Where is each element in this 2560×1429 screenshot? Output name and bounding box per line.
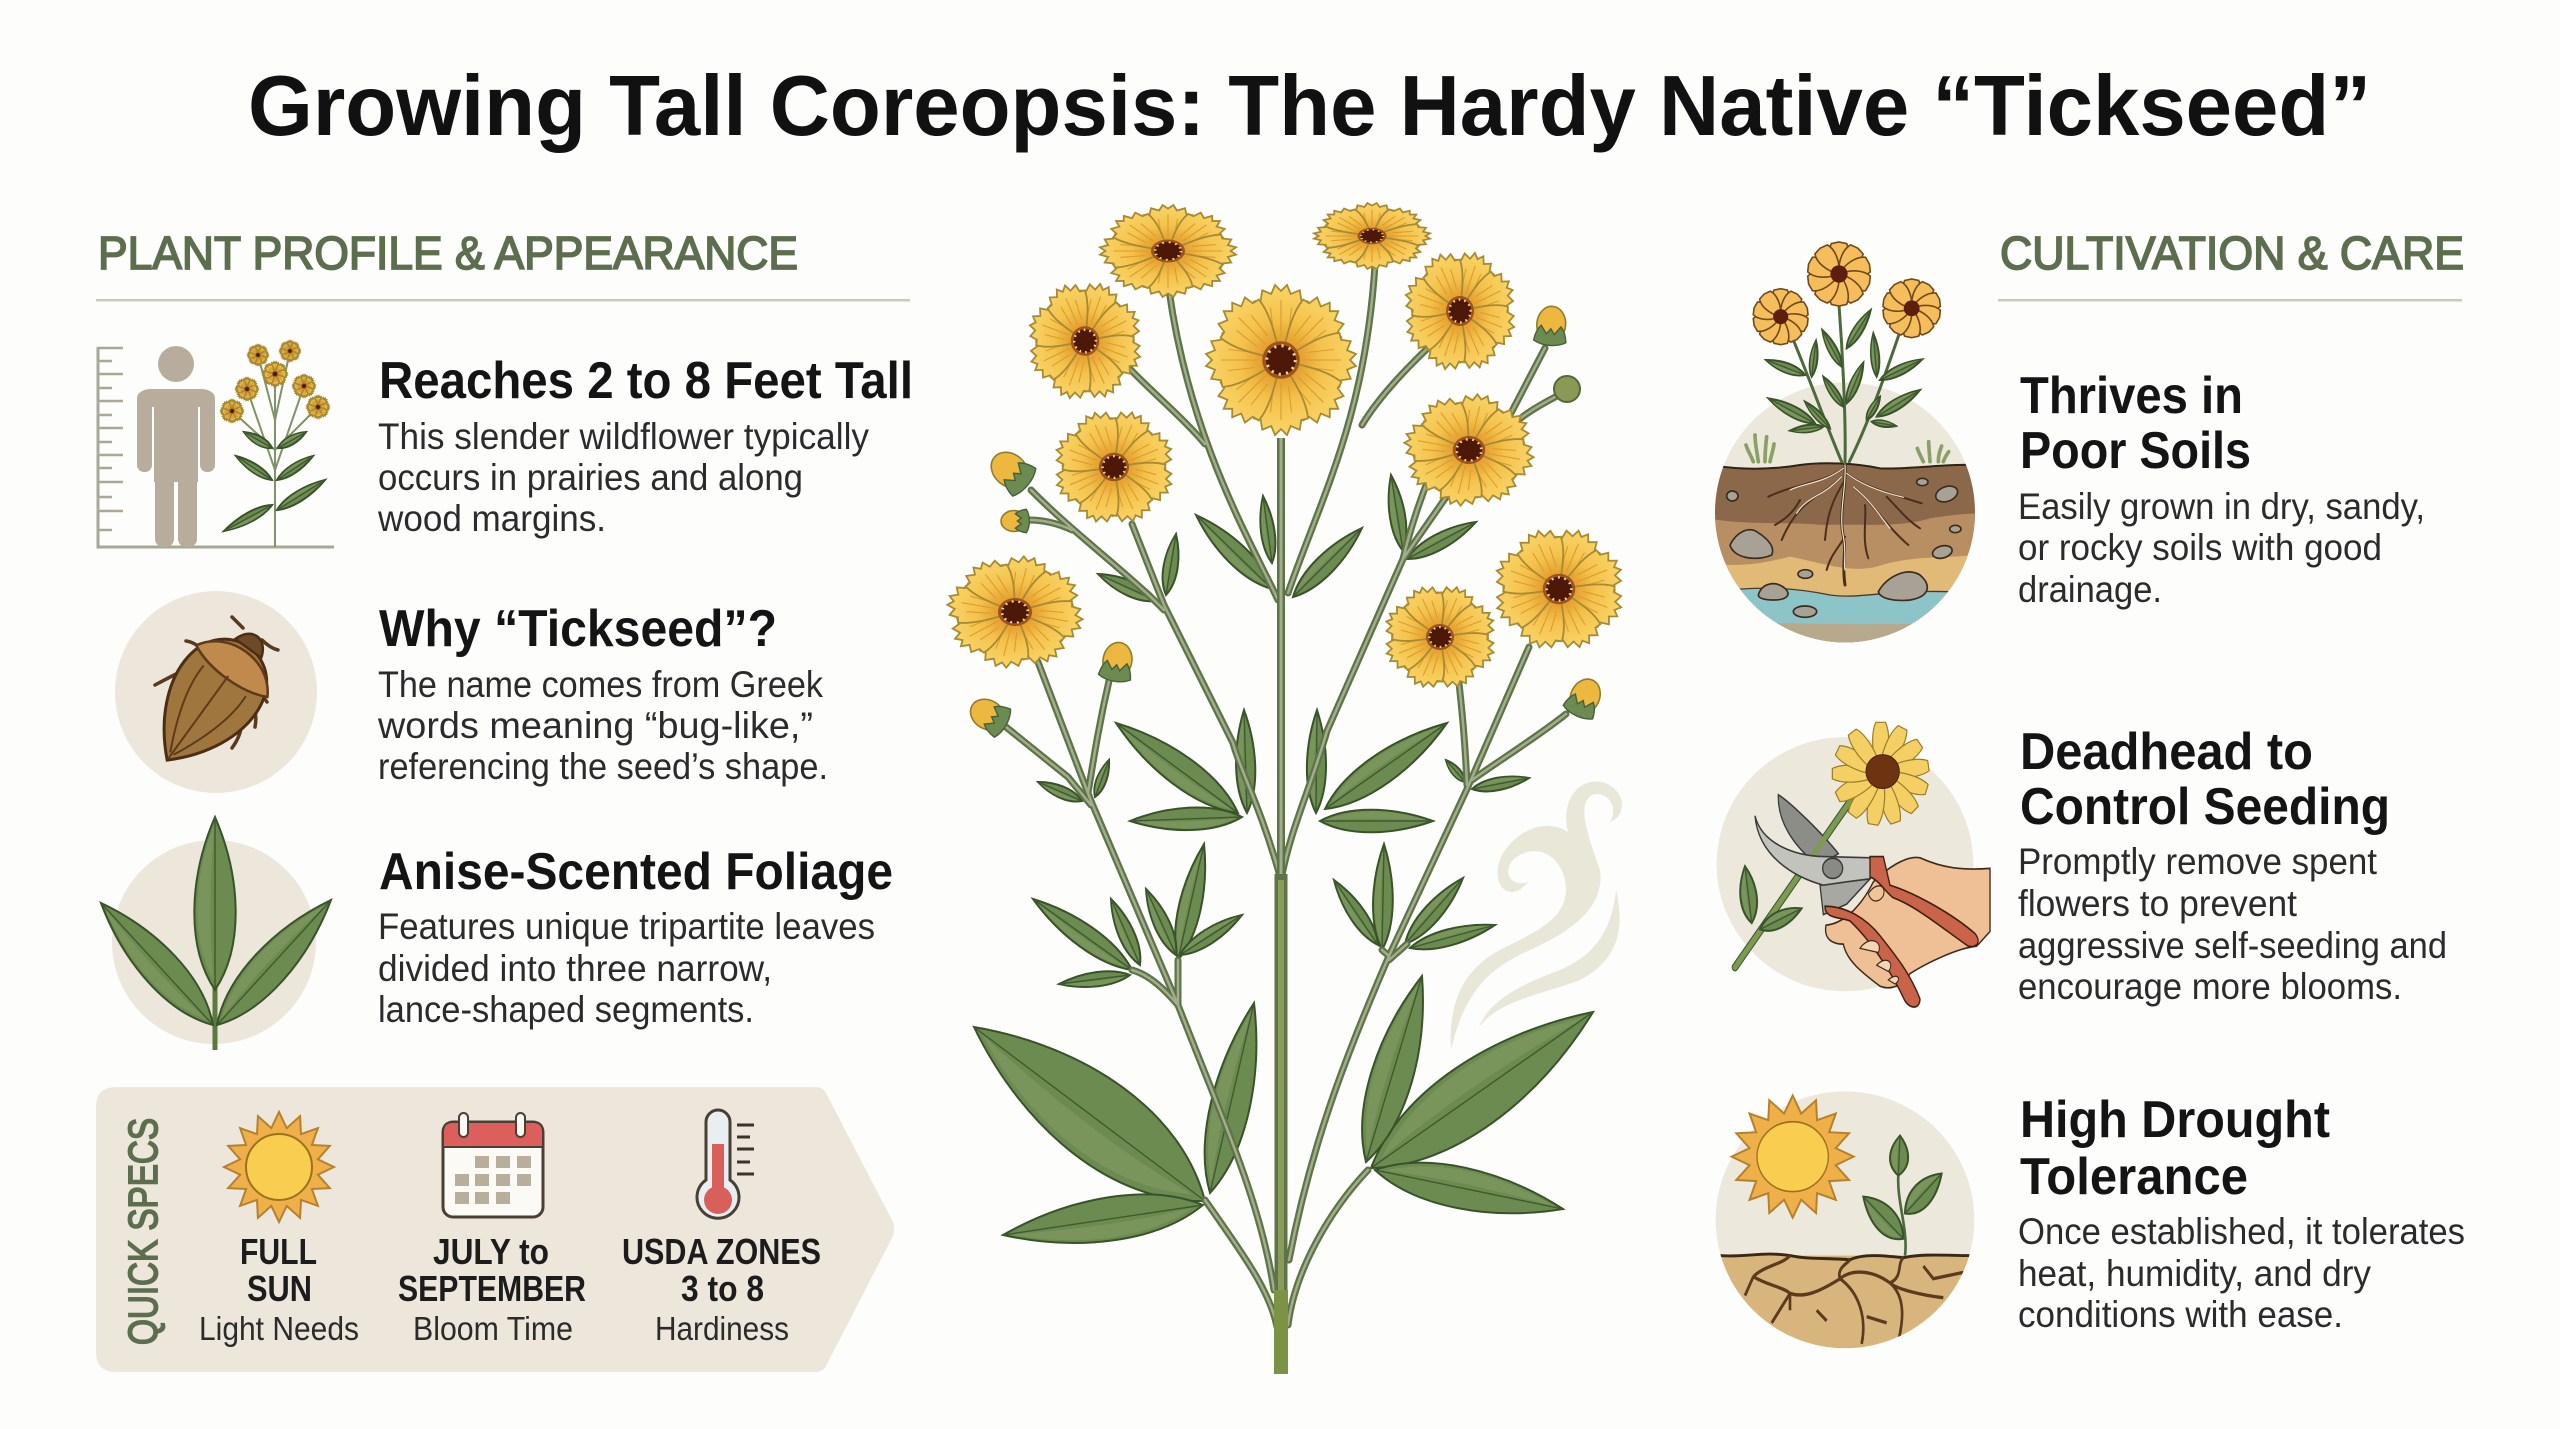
item: drought tolerance <box>1710 1091 2465 1357</box>
text: drought description: conditions with ease. <box>2018 1294 2343 1335</box>
icon: thermometer <box>697 1110 754 1218</box>
heading: high drought tolerance <box>2020 1091 2330 1206</box>
heading: thrives in poor soils: Thrives in <box>2020 367 2243 425</box>
flowers <box>934 203 1644 705</box>
spec: hardiness <box>622 1110 821 1347</box>
stems <box>1006 265 1566 1374</box>
spec: hardiness: USDA ZONES <box>622 1231 821 1272</box>
text: deadhead description: flowers to prevent <box>2018 883 2298 924</box>
text: drought description: heat, humidity, and dry <box>2018 1253 2371 1294</box>
text: tickseed description: The name comes from Greek <box>378 664 823 705</box>
icon: sun <box>224 1112 334 1222</box>
heading: deadhead to control seeding <box>2020 723 2390 836</box>
spec: full sun: FULL <box>240 1231 317 1272</box>
text: height description: wood margins. <box>377 498 606 539</box>
spec: full sun: SUN <box>247 1268 312 1309</box>
text: foliage description: lance-shaped segments. <box>378 989 754 1030</box>
label: quick specs: QUICK SPECS <box>120 1118 166 1345</box>
text: deadhead description <box>2018 841 2447 1007</box>
icon: pruners cutting spent flower <box>1717 722 1990 1007</box>
text: soils description: drainage. <box>2018 569 2162 610</box>
scent wisps <box>1451 781 1622 1050</box>
heading: anise-scented foliage: Anise-Scented Foliage <box>379 843 893 901</box>
icon: sun, seedling and cracked earth <box>1710 1091 1983 1357</box>
heading: why tickseed: Why “Tickseed”? <box>379 600 777 658</box>
spec: hardiness: 3 to 8 <box>681 1268 764 1309</box>
text: deadhead description: aggressive self-seeding and <box>2018 925 2447 966</box>
item: deadhead <box>1717 722 2447 1007</box>
item: why tickseed <box>115 591 828 793</box>
heading: plant profile: PLANT PROFILE & APPEARANCE <box>98 227 798 279</box>
text: soils description: or rocky soils with good <box>2018 527 2382 568</box>
heading: high drought tolerance: High Drought <box>2020 1091 2330 1149</box>
text: soils description <box>2018 486 2425 610</box>
heading: thrives in poor soils <box>2020 367 2251 480</box>
text: soils description: Easily grown in dry, sandy, <box>2018 486 2425 527</box>
item: height <box>98 341 913 547</box>
item: poor soils <box>1710 242 2425 653</box>
icon: tripartite leaf <box>87 817 345 1050</box>
text: tickseed description <box>377 664 828 787</box>
leaves <box>949 474 1612 1256</box>
central illustration: tall coreopsis plant <box>934 203 1644 1374</box>
icon: soil cross-section with plant <box>1710 242 1983 653</box>
text: height description: occurs in prairies and along <box>378 457 803 498</box>
spec: bloom time: Bloom Time <box>413 1310 573 1347</box>
text: foliage description <box>378 906 875 1030</box>
icon: height ruler with person and plant <box>98 341 334 547</box>
heading: reaches 2 to 8 feet: Reaches 2 to 8 Feet Tall <box>379 352 913 410</box>
text: deadhead description: Promptly remove spent <box>2018 841 2378 882</box>
text: drought description <box>2018 1211 2465 1335</box>
heading: cultivation and care: CULTIVATION & CARE <box>2000 227 2464 279</box>
spec: hardiness: Hardiness <box>655 1310 789 1347</box>
heading: deadhead to control seeding: Deadhead to <box>2020 723 2313 781</box>
spec: bloom time: JULY to <box>433 1231 549 1272</box>
item: anise-scented foliage <box>87 817 893 1050</box>
spec: full sun <box>199 1112 359 1347</box>
text: foliage description: Features unique tripartite leaves <box>378 906 875 947</box>
spec: bloom time: SEPTEMBER <box>398 1268 586 1309</box>
text: drought description: Once established, it tolerates <box>2018 1211 2465 1252</box>
panel: plant profile and appearance <box>87 227 913 1050</box>
text: deadhead description: encourage more blooms. <box>2018 966 2402 1007</box>
heading: deadhead to control seeding: Control Seeding <box>2020 778 2390 836</box>
text: foliage description: divided into three narrow, <box>378 948 772 989</box>
buds <box>964 305 1607 739</box>
text: height description: This slender wildflower typically <box>378 416 869 457</box>
spec: bloom time <box>398 1113 586 1347</box>
panel: quick specs <box>96 1087 894 1372</box>
text: tickseed description: referencing the seed’s shape. <box>378 746 828 787</box>
spec: full sun: Light Needs <box>199 1310 359 1347</box>
text: tickseed description: words meaning “bug-like,” <box>377 705 813 746</box>
panel: cultivation and care <box>1710 227 2465 1357</box>
icon: bug-like seed <box>115 591 317 793</box>
text: height description <box>377 416 869 539</box>
heading: thrives in poor soils: Poor Soils <box>2020 422 2251 480</box>
heading: high drought tolerance: Tolerance <box>2020 1148 2248 1206</box>
icon: calendar <box>443 1113 543 1217</box>
title: Growing Tall Coreopsis: The Hardy Native “Tickseed” <box>248 59 2371 154</box>
